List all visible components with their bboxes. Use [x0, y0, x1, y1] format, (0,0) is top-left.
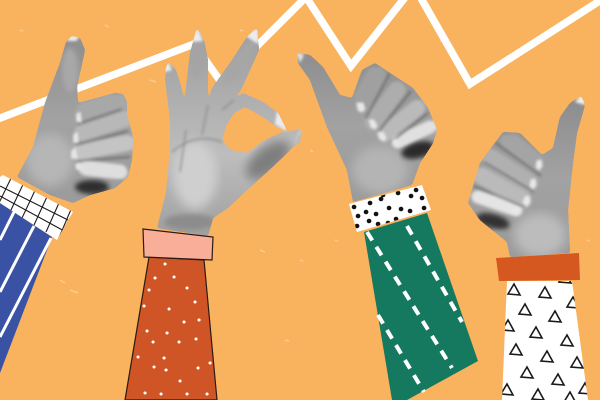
- cuff: orange: [496, 253, 580, 281]
- arm 4: white triangle sleeve with orange cuff: [468, 96, 588, 400]
- hand 3: thumbs sideways: [297, 53, 437, 202]
- nails: [357, 103, 399, 146]
- hand 2: OK sign: [158, 29, 302, 236]
- hand 1: thumbs up: [18, 36, 133, 203]
- arm 3: green dashed sleeve with dotted cuff: [290, 40, 478, 400]
- sleeve dashes: [367, 226, 462, 392]
- sleeve: blue: [0, 203, 52, 373]
- nails: [72, 113, 81, 169]
- cuff: white with black dots: [349, 185, 431, 232]
- white rising line chart: [0, 0, 600, 120]
- cuff: pink: [143, 229, 213, 260]
- nails: [165, 28, 302, 146]
- sleeve specks: [138, 264, 210, 394]
- hand 4: thumbs up mirrored: [468, 96, 585, 257]
- sleeve triangles: [502, 281, 588, 400]
- cuff: white check: [0, 175, 73, 240]
- arm 2: red speckled sleeve with pink cuff: [125, 20, 310, 400]
- arm 1: blue striped sleeve with check cuff: [0, 36, 133, 373]
- sleeve stripes: [0, 212, 51, 337]
- sleeve: green: [364, 213, 478, 400]
- nails: [513, 160, 542, 213]
- sleeve: white: [502, 281, 588, 400]
- sleeve: red: [125, 257, 217, 400]
